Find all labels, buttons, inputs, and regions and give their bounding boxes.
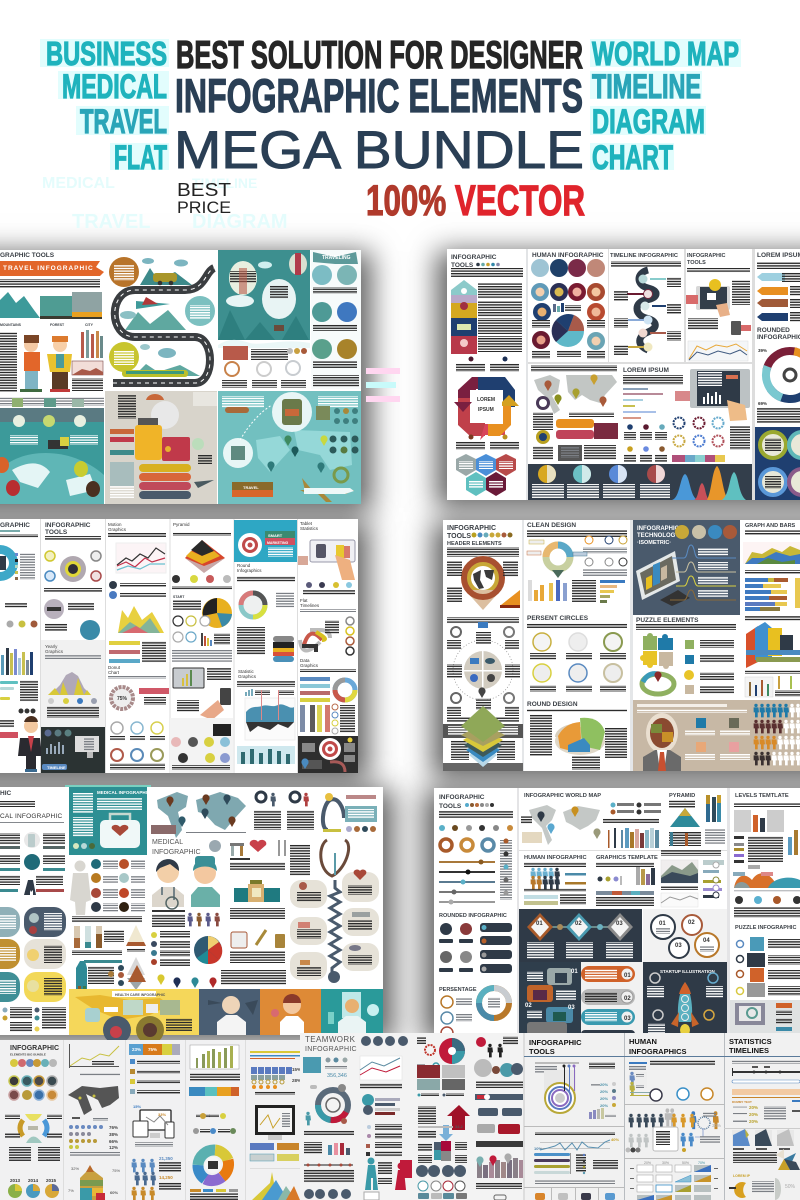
bundle column three: 15%: [133, 1104, 141, 1109]
lorem ipsum column: 39%: [758, 348, 767, 353]
body organ panel: [70, 859, 146, 994]
stacked 3D block chart: 60%: [110, 1190, 118, 1195]
octagon arrow cycle: IPSUM: [478, 407, 494, 413]
hourglass ring: [20, 1114, 47, 1143]
column six: tablet, donut, target: Flat: [300, 598, 308, 603]
human icons top: [624, 1060, 724, 1129]
column three: charts: 75%: [117, 696, 128, 702]
category labels left: MEDICAL: [62, 68, 167, 106]
stacked 3D block chart: 32%: [71, 1166, 79, 1171]
isometric technology panel: ·ISOMETRIC·: [637, 540, 671, 546]
concentric ring chart: 20%: [600, 1089, 608, 1094]
lorem ipsum hand tablet block: [623, 367, 750, 462]
timeline column: TIMELINE INFOGRAPHIC: [610, 253, 678, 259]
rounded category tiles: [0, 907, 66, 1002]
pyramid column: PYRAMID: [669, 793, 695, 799]
globe panel: [0, 408, 104, 504]
landscape strip: FOREST: [50, 323, 65, 327]
bundle title and column one: ELEMENTS BIG BUNDLE: [10, 1052, 46, 1056]
world pin: [464, 559, 502, 610]
best price label: PRICE: [177, 198, 231, 217]
human icon groups: 30%: [712, 1123, 721, 1128]
numbered ring panel: 02: [688, 920, 695, 926]
world map column: [521, 793, 661, 848]
category labels right: [590, 35, 741, 177]
lorem ipsum column: [756, 252, 800, 423]
medical left column: HIC: [0, 790, 12, 797]
tablet tools column: INFOGRAPHIC: [687, 253, 726, 259]
numbered ring panel: [643, 909, 727, 962]
medical left column: [0, 790, 66, 1032]
circle segment chart: [198, 1150, 229, 1181]
medical left column: CAL INFOGRAPHIC: [0, 813, 62, 820]
bundle title and column one: INFOGRAPHIC: [10, 1045, 59, 1052]
medical icon rows: [230, 840, 285, 963]
tools line chart: [524, 1132, 624, 1200]
rounded arrow ring: [756, 341, 800, 409]
100% vector label: 100% VECTOR: [366, 177, 585, 225]
statistics segmented fan: [776, 1149, 800, 1170]
human table chart: 30%: [662, 1161, 669, 1165]
isometric technology panel: INFOGRAPHIC: [637, 526, 680, 532]
column one: pie and person: GRAPHIC: [0, 522, 30, 529]
pyramid column: [669, 793, 725, 846]
percentage donut: [479, 988, 509, 1018]
section headings: STATISTICS: [729, 1037, 772, 1046]
medical heading and doctors: [151, 839, 286, 988]
column six: tablet, donut, target: Tablet: [300, 521, 313, 526]
clean design column: [527, 522, 627, 770]
column three: charts: Graphics: [108, 527, 127, 532]
landscape strip: CITY: [85, 323, 94, 327]
bundle column five: 15%: [292, 1067, 301, 1072]
human icon groups: [624, 1112, 724, 1159]
column three: charts: Motion: [108, 522, 122, 527]
board: infographic elements big bundle: [0, 1040, 302, 1200]
bundle column four: [189, 1045, 240, 1200]
3D pie: [555, 718, 605, 755]
road badge circles: [109, 257, 215, 372]
section headings: HUMAN: [629, 1037, 657, 1046]
category labels right: WORLD MAP: [592, 35, 739, 72]
graph and bars column: [743, 523, 800, 697]
human table chart: 70%: [698, 1161, 705, 1165]
ghost text artefacts: TIMELINE: [192, 175, 257, 191]
numbered ring panel: 04: [703, 938, 710, 944]
travel world map panel: [218, 391, 361, 504]
diamond stack: [443, 706, 523, 771]
column three: charts: Chart: [108, 670, 120, 675]
medical bottom strip: HEALTH CARE INFOGRAPHIC: [115, 993, 166, 997]
best price label: BEST: [177, 180, 231, 200]
column four: pyramid and monitor: START: [173, 595, 185, 599]
section headings: TOOLS: [529, 1047, 555, 1056]
statistics timeline: 20%: [749, 1112, 758, 1117]
column six: tablet, donut, target: Statistics: [300, 526, 319, 531]
column five: marketing: Graphics: [238, 674, 257, 679]
tablet tools column: [686, 253, 751, 361]
stacked 3D block chart: 7%: [68, 1188, 74, 1193]
teamwork right column: 34.2: [455, 1124, 464, 1129]
balloon panel: [218, 250, 310, 348]
bar chart and grid: [72, 330, 103, 391]
dark diamond panel: 03: [616, 921, 623, 927]
luggage panel: [105, 391, 217, 504]
bundle column three: 14,250: [159, 1175, 173, 1180]
left tools column: TOOLS: [451, 262, 474, 269]
bundle column five: 28%: [292, 1078, 301, 1083]
travelling column: TRAVELING: [322, 255, 351, 261]
column five: marketing: MARKETING: [267, 541, 288, 545]
clean design column: PERSENT CIRCLES: [527, 615, 589, 622]
board: world map levels rocket: [434, 788, 800, 1039]
human infographic block: GRAPHICS TEMPLATE: [596, 855, 658, 861]
column three: charts: [108, 522, 169, 770]
couple characters: [0, 332, 72, 392]
column six: tablet, donut, target: Data: [300, 658, 310, 663]
medical pie chart: [194, 936, 222, 964]
header elements column: [443, 525, 523, 771]
column six: tablet, donut, target: Timelines: [300, 603, 320, 608]
dark diamond panel: 01: [536, 921, 543, 927]
concentric ring chart: [524, 1062, 624, 1127]
number flow panel: 03: [568, 1005, 575, 1011]
tools line chart: 40%: [611, 1137, 619, 1142]
bundle column two: 66%: [109, 1139, 118, 1144]
stats below balloons: [222, 346, 307, 388]
small item row: [0, 397, 104, 407]
number flow panel: 02: [525, 1003, 532, 1009]
young doctor: [271, 994, 304, 1035]
road map: [109, 257, 215, 383]
lorem ipsum column: 69%: [758, 401, 767, 406]
section headings: INFOGRAPHIC: [529, 1038, 582, 1047]
doctor character left: [152, 859, 184, 909]
dark diamond panel: 02: [575, 921, 582, 927]
round sector flower: [453, 640, 513, 700]
title block: [40, 34, 741, 225]
human infographic column: HUMAN INFOGRAPHIC: [532, 252, 604, 259]
businessman character: [18, 716, 42, 772]
column one: pie and person: [0, 522, 42, 772]
statistics mini tiles: [729, 1129, 800, 1200]
numbered pills: 02: [624, 996, 631, 1002]
travel world map panel: TRAVEL: [243, 485, 259, 490]
category labels right: TIMELINE: [592, 68, 701, 106]
board: tools human statistics: [523, 1033, 800, 1200]
top icon row: [361, 1036, 408, 1046]
bundle title and column one: 2013: [10, 1178, 21, 1183]
section headings: INFOGRAPHICS: [629, 1047, 687, 1056]
bundle column two: [68, 1044, 120, 1200]
bundle column three: 33%: [158, 1112, 166, 1117]
tablet tools column: TOOLS: [687, 260, 706, 266]
dark target panel: [298, 736, 358, 773]
human infographic block: HUMAN INFOGRAPHIC: [524, 855, 587, 861]
graph and bars column: GRAPH AND BARS: [745, 523, 796, 529]
bundle column three: 75%: [148, 1047, 157, 1052]
bundle column three: 23%: [132, 1047, 141, 1052]
teal first aid panel: MEDICAL INFOGRAPHIC: [97, 790, 151, 795]
statistics mini tiles: 50%: [785, 1184, 796, 1190]
elder doctor: [208, 996, 258, 1035]
navy ring panel: [755, 427, 800, 500]
concentric ring chart: 20%: [600, 1082, 608, 1087]
doctor character right: [191, 856, 220, 907]
board: infographic tools human timeline: [447, 249, 800, 500]
bundle column two: 76%: [109, 1125, 118, 1130]
isometric technology panel: TECHNOLOGY: [637, 533, 679, 539]
startup rocket panel: [643, 962, 727, 1036]
column two: tools and yearly: Graphics: [45, 649, 64, 654]
landscape strip: MOUNTAINS: [0, 323, 22, 327]
concentric ring chart: 20%: [600, 1103, 608, 1108]
tools column: [439, 794, 513, 1039]
numbered ring panel: 01: [659, 921, 666, 927]
dark diamond panel: [519, 909, 642, 962]
column six: tablet, donut, target: Graphics: [300, 663, 319, 668]
ghost text artefacts: [42, 175, 400, 402]
medical world map: [151, 792, 314, 838]
ghost text artefacts: TRAVEL: [72, 211, 151, 233]
category labels left: [40, 35, 169, 177]
travelling column: [311, 250, 361, 389]
stacked 3D block chart: 75%: [112, 1168, 120, 1173]
dark timeline block: TIMELINE: [47, 765, 66, 770]
levels template column: [730, 793, 800, 1035]
human infographic column: [531, 252, 605, 359]
stacked 3D block chart: [68, 1165, 120, 1200]
teamwork stat block: [303, 1057, 348, 1079]
levels template column: PUZZLE INFOGRAPHIC: [735, 925, 796, 931]
column five: marketing: Round: [237, 563, 251, 568]
numbered ring panel: 03: [675, 943, 682, 949]
teamwork stat block: 356,346: [327, 1073, 347, 1079]
clean design column: CLEAN DESIGN: [527, 522, 576, 529]
isometric technology panel: [633, 520, 740, 615]
puzzle elements: [636, 617, 736, 694]
tools line chart: 10%: [534, 1146, 542, 1151]
human table chart: 20%: [644, 1161, 651, 1165]
dark timeline block: [41, 727, 105, 773]
column four: pyramid and monitor: Pyramid: [173, 522, 190, 527]
best price label: [177, 180, 231, 217]
column five: marketing: SMART: [268, 533, 283, 538]
bundle column three: [129, 1044, 181, 1200]
statistics mini tiles: LOREM IP: [733, 1174, 751, 1178]
tools column: INFOGRAPHIC: [439, 794, 485, 801]
tools column: ROUNDED INFOGRAPHIC: [439, 913, 507, 919]
column five: marketing: [234, 520, 297, 764]
number flow panel: [519, 962, 581, 1035]
category labels left: FLAT: [114, 139, 167, 177]
column two: tools and yearly: Yearly: [45, 644, 58, 649]
teamwork heading: [305, 1035, 357, 1053]
world map block: [531, 365, 618, 461]
statistics timeline: [724, 1060, 800, 1129]
board: medical infographic: [0, 785, 383, 1044]
medical heading and doctors: MEDICAL: [152, 839, 183, 846]
lorem ipsum hand tablet block: LOREM IPSUM: [623, 367, 669, 374]
travel heading and banner: GRAPHIC TOOLS: [0, 252, 55, 259]
category labels left: BUSINESS: [46, 35, 167, 72]
levels template column: LEVELS TEMTLATE: [735, 793, 789, 799]
bundle column three: 21,350: [159, 1156, 173, 1161]
brain ring: [318, 1090, 348, 1120]
tools column: TOOLS: [439, 803, 462, 810]
concentric ring chart: 20%: [600, 1096, 608, 1101]
left tools column: INFOGRAPHIC: [451, 254, 497, 261]
landscape strip: [0, 292, 102, 327]
bundle column two: 38%: [109, 1132, 118, 1137]
board: travel infographic: [0, 250, 361, 504]
clean design column: ROUND DESIGN: [527, 701, 578, 708]
headline line 2: INFOGRAPHIC ELEMENTS: [175, 69, 583, 122]
category labels right: CHART: [592, 139, 673, 177]
road scenery: [120, 258, 200, 377]
puzzle elements: PUZZLE ELEMENTS: [636, 617, 699, 624]
column four: pyramid and monitor: [170, 522, 233, 773]
column two: tools and yearly: [41, 522, 105, 773]
startup rocket panel: STARTUP ILLUSTRATION: [660, 969, 715, 974]
puzzle head figure: [643, 718, 681, 771]
world map column: INFOGRAPHIC WORLD MAP: [524, 793, 601, 799]
human table chart: 50%: [682, 1161, 689, 1165]
hexagon cluster: [456, 454, 516, 496]
timeline column: [610, 253, 681, 355]
board: teamwork infographic: [300, 1033, 525, 1200]
column five: marketing: Statistic: [238, 669, 255, 674]
headline line 1: BEST SOLUTION FOR DESIGNER: [176, 34, 583, 77]
travel heading and banner: TRAVEL INFOGRAPHIC: [3, 265, 94, 272]
board: clean design and puzzles: [443, 520, 800, 771]
scientist: [328, 992, 379, 1035]
ghost text artefacts: MEDICAL: [42, 175, 115, 192]
teamwork right column: [400, 1036, 525, 1200]
column five: marketing: Infographics: [237, 568, 262, 573]
medical bottom strip: [69, 989, 383, 1044]
microscope stethoscope callout: [323, 793, 377, 832]
number flow panel: 01: [571, 969, 578, 975]
header elements column: INFOGRAPHIC: [447, 525, 496, 532]
lorem ipsum column: ROUNDED: [757, 327, 790, 334]
column six: tablet, donut, target: [298, 521, 358, 773]
header elements column: TOOLS: [447, 533, 471, 540]
travel heading and banner: [0, 252, 104, 288]
column two: tools and yearly: INFOGRAPHIC: [45, 522, 91, 529]
category labels right: DIAGRAM: [592, 103, 705, 141]
dark percent strip: [528, 464, 752, 500]
stacked banner: [451, 280, 477, 354]
octagon arrow cycle: [454, 377, 519, 440]
category labels left: TRAVEL: [80, 103, 167, 141]
board: charts and marketing: [0, 519, 358, 773]
ghost text artefacts: DIAGRAM: [192, 211, 288, 233]
bundle column five: [250, 1051, 301, 1200]
tools column: PERSENTAGE: [439, 987, 477, 993]
numbered pills: 01: [624, 973, 631, 979]
bundle title and column one: 2015: [46, 1178, 57, 1183]
human infographic block: [519, 850, 727, 907]
bundle title and column one: [5, 1045, 62, 1198]
human pie: [552, 314, 584, 347]
teamwork far-right charts: [474, 1036, 525, 1200]
numbered pills: [581, 962, 643, 1038]
bundle title and column one: 2014: [28, 1178, 39, 1183]
numbered pills: 03: [624, 1016, 631, 1022]
column two: tools and yearly: TOOLS: [45, 529, 68, 536]
bundle column two: 12%: [109, 1145, 118, 1150]
column three: charts: Donut: [108, 665, 121, 670]
left tools column: [451, 254, 523, 496]
octagon arrow cycle: LOREM: [477, 397, 495, 403]
section headings: [529, 1037, 772, 1056]
human table chart: [630, 1161, 718, 1200]
teamwork heading: TEAMWORK: [305, 1035, 356, 1044]
medical snake timeline: [289, 840, 379, 983]
headline line 3: MEGA BUNDLE: [174, 121, 584, 180]
section headings: TIMELINES: [729, 1046, 769, 1055]
teal first aid panel: [65, 785, 151, 855]
teamwork mid column: [360, 1056, 406, 1200]
human infographic beige panel: [633, 700, 800, 771]
statistics timeline: DUMMY TEXT: [732, 1100, 752, 1104]
header elements column: HEADER ELEMENTS: [447, 541, 502, 547]
medical heading and doctors: INFOGRAPHIC: [152, 849, 201, 856]
statistics timeline: 20%: [749, 1119, 758, 1124]
teamwork heading: INFOGRAPHIC: [305, 1046, 357, 1053]
statistics timeline: 20%: [749, 1105, 758, 1110]
